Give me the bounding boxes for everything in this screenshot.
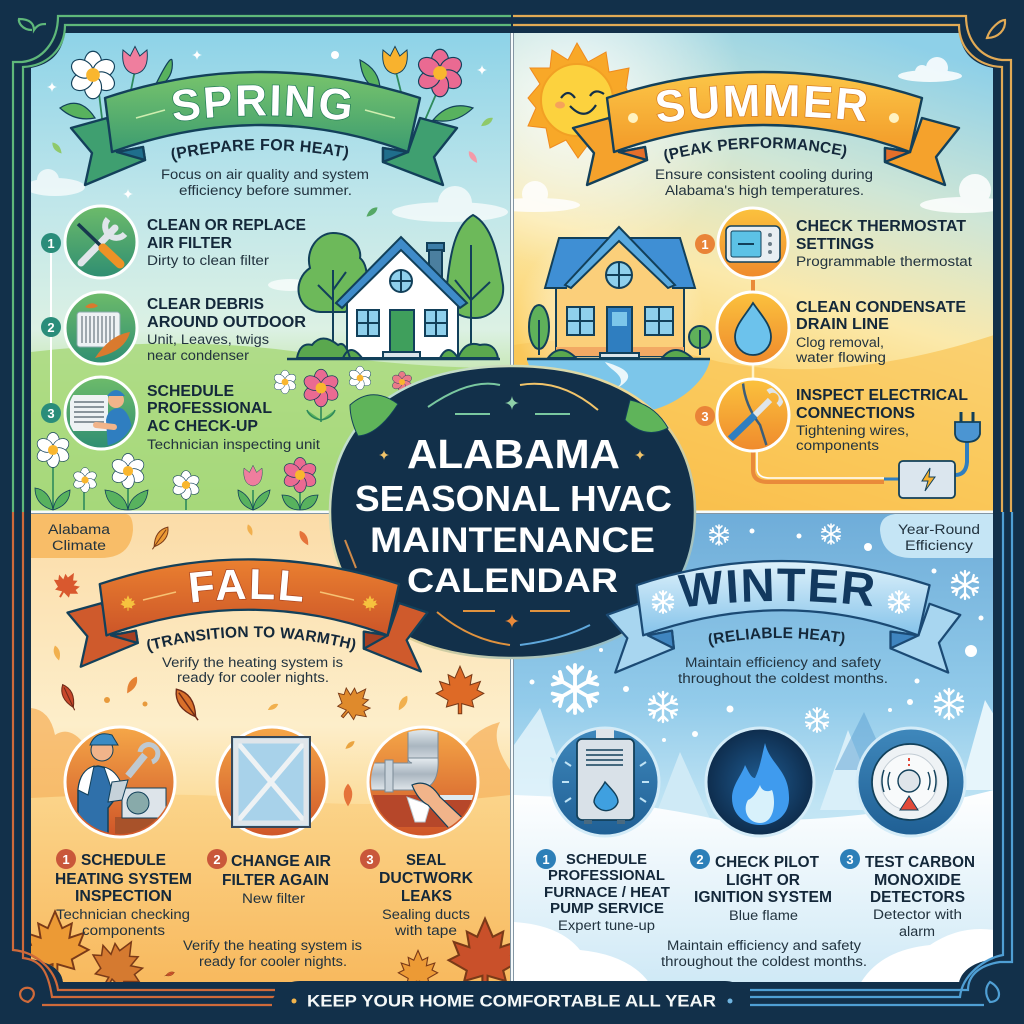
banner: winter bbox=[607, 561, 960, 673]
spring content bbox=[34, 46, 504, 511]
title text: CALENDAR bbox=[407, 562, 618, 600]
badge ornaments bbox=[345, 384, 598, 645]
step text: spring: AC CHECK-UP bbox=[147, 418, 258, 435]
icon: carbon monoxide detector bbox=[857, 728, 965, 836]
clouds: summer bbox=[490, 57, 1010, 213]
step text: fall: New filter bbox=[242, 891, 306, 906]
closing text: fall bbox=[183, 938, 362, 969]
banner: summer bbox=[573, 72, 959, 185]
step timeline: spring bbox=[41, 233, 61, 423]
sun glow bbox=[514, 33, 720, 251]
step text: spring: CLEAR DEBRIS bbox=[147, 296, 264, 313]
closing text: winter bbox=[661, 938, 867, 969]
icon: furnace bbox=[551, 728, 659, 836]
step text: spring: Dirty to clean filter bbox=[147, 253, 270, 268]
falling leaves bbox=[48, 524, 484, 809]
step text: summer: CONNECTIONS bbox=[796, 405, 915, 422]
step text: fall: DUCTWORK bbox=[379, 870, 474, 887]
step text: summer: components bbox=[796, 438, 879, 453]
house glow bbox=[522, 258, 696, 358]
pill: Alabama Climate: Alabama bbox=[48, 522, 111, 537]
intro text: spring bbox=[161, 167, 369, 198]
step text: winter: IGNITION SYSTEM bbox=[694, 889, 832, 906]
panel: fall bbox=[21, 514, 521, 1001]
summer content bbox=[527, 42, 981, 499]
step text: summer: SETTINGS bbox=[796, 236, 874, 253]
snowy trees bbox=[514, 700, 994, 830]
step text: summer: DRAIN LINE bbox=[796, 316, 889, 333]
pill: Year-Round Efficiency bbox=[880, 514, 993, 558]
step text: summer: Tightening wires, bbox=[796, 423, 909, 438]
meadow flowers bbox=[35, 366, 413, 510]
subheading: winter: (RELIABLE HEAT) bbox=[708, 627, 844, 648]
icon: wrench and wires bbox=[717, 379, 789, 451]
closing text: fall: Verify the heating system is bbox=[183, 938, 362, 953]
step text: winter: Expert tune-up bbox=[558, 918, 655, 933]
dunes: summer bbox=[514, 335, 994, 511]
step text: winter: FURNACE / HEAT bbox=[544, 885, 670, 901]
clouds: spring bbox=[25, 169, 508, 291]
step text: fall: 1 bbox=[62, 852, 70, 867]
step text: spring: CLEAN OR REPLACE bbox=[147, 217, 306, 234]
step text: fall: Technician checking bbox=[56, 907, 190, 922]
step text: spring: near condenser bbox=[147, 348, 250, 363]
intro text: winter: throughout the coldest months. bbox=[678, 671, 888, 686]
banner snowflakes bbox=[652, 591, 910, 613]
heading: summer: SUMMER bbox=[656, 84, 867, 122]
snow drifts bbox=[514, 922, 994, 984]
subheading: spring: (PREPARE FOR HEAT) bbox=[172, 139, 348, 163]
step text: spring: SCHEDULE bbox=[147, 383, 234, 400]
step text: winter: Blue flame bbox=[729, 908, 798, 923]
step text: summer: CLEAN CONDENSATE bbox=[796, 299, 966, 316]
step text: fall bbox=[55, 849, 474, 938]
intro text: spring: Focus on air quality and system bbox=[161, 167, 369, 182]
step text: winter: LIGHT OR bbox=[726, 872, 800, 889]
intro text: spring: efficiency before summer. bbox=[179, 183, 352, 198]
step text: winter: TEST CARBON bbox=[865, 854, 975, 871]
bottom banner bbox=[272, 981, 750, 1024]
hill: spring meadow bbox=[31, 344, 511, 511]
step text: winter: Detector with bbox=[873, 907, 962, 922]
step text: winter: 2 bbox=[696, 852, 704, 867]
icon: outdoor unit with leaves bbox=[65, 292, 137, 364]
intro text: winter bbox=[678, 655, 888, 686]
step text: summer: Clog removal, bbox=[796, 335, 884, 350]
step text: winter: SCHEDULE bbox=[566, 852, 647, 868]
intro text: fall bbox=[162, 655, 343, 685]
pill: Alabama Climate: Climate bbox=[52, 538, 106, 553]
title text: ALABAMA bbox=[407, 431, 620, 477]
connectors: summer bbox=[753, 280, 884, 482]
panel: summer bbox=[514, 33, 993, 510]
step text: fall: with tape bbox=[394, 923, 457, 938]
step text: spring: Technician inspecting unit bbox=[147, 437, 320, 452]
sparkles and petals: spring bbox=[47, 50, 487, 199]
step text: winter: CHECK PILOT bbox=[715, 854, 820, 871]
icon: wrench and screwdriver bbox=[65, 206, 137, 278]
intro text: fall: ready for cooler nights. bbox=[177, 670, 329, 685]
icon: smiling sun bbox=[528, 43, 632, 158]
icon: new air filter bbox=[217, 727, 327, 837]
banner text: KEEP YOUR HOME COMFORTABLE ALL YEAR bbox=[307, 992, 716, 1010]
step text: summer: INSPECT ELECTRICAL bbox=[796, 387, 968, 404]
step text: fall: INSPECTION bbox=[75, 888, 172, 905]
step text: winter bbox=[536, 849, 975, 939]
step text: fall: SCHEDULE bbox=[81, 852, 166, 869]
badges: summer bbox=[695, 234, 715, 426]
step text: winter: PUMP SERVICE bbox=[550, 901, 664, 917]
icon: sealing ductwork bbox=[368, 727, 480, 837]
step text: winter: 3 bbox=[846, 852, 854, 867]
step text: fall: components bbox=[82, 923, 165, 938]
pill: Year-Round Efficiency: Year-Round bbox=[898, 522, 980, 537]
step text: spring: Unit, Leaves, twigs bbox=[147, 332, 269, 347]
badges: summer: 3 bbox=[701, 409, 709, 424]
title text: MAINTENANCE bbox=[370, 521, 655, 560]
step timeline: spring: 2 bbox=[47, 320, 55, 335]
step text: fall: SEAL bbox=[406, 852, 446, 869]
house: summer bbox=[527, 227, 711, 412]
closing text: winter: throughout the coldest months. bbox=[661, 954, 867, 969]
step text: summer: Programmable thermostat bbox=[796, 254, 972, 269]
ground: fall bbox=[31, 794, 510, 984]
top flowers bbox=[60, 46, 473, 135]
banner ornaments: spring bbox=[136, 110, 395, 118]
step timeline: spring: 3 bbox=[47, 406, 55, 421]
orange trees silhouette bbox=[31, 708, 510, 800]
icon: thermostat bbox=[718, 208, 788, 278]
intro text: winter: Maintain efficiency and safety bbox=[685, 655, 881, 670]
step text: fall: FILTER AGAIN bbox=[222, 872, 329, 889]
center title badge bbox=[330, 366, 695, 658]
frame lines: gold top-right bbox=[513, 16, 1011, 512]
step text: summer: CHECK THERMOSTAT bbox=[796, 218, 967, 235]
title text: SEASONAL HVAC bbox=[355, 478, 672, 519]
title text bbox=[355, 431, 672, 600]
step text: fall: LEAKS bbox=[401, 888, 452, 905]
step text: winter: PROFESSIONAL bbox=[548, 868, 665, 884]
step text: fall: HEATING SYSTEM bbox=[55, 871, 192, 888]
intro text: fall: Verify the heating system is bbox=[162, 655, 343, 670]
intro text: summer bbox=[655, 167, 873, 198]
dots of snow bbox=[530, 528, 984, 742]
closing text: winter: Maintain efficiency and safety bbox=[667, 938, 861, 953]
badges: summer: 1 bbox=[701, 237, 709, 252]
icon: technician with outdoor unit bbox=[65, 727, 175, 838]
banner dots bbox=[292, 998, 732, 1004]
snow ground bbox=[514, 790, 994, 984]
step text: spring: AROUND OUTDOOR bbox=[147, 314, 306, 331]
badge leaves bbox=[350, 395, 668, 436]
step text: fall: CHANGE AIR bbox=[231, 853, 331, 870]
intro text: summer: Ensure consistent cooling during bbox=[655, 167, 873, 182]
petals: spring bbox=[50, 116, 494, 220]
step text: winter: DETECTORS bbox=[870, 889, 965, 906]
step text: fall: 3 bbox=[366, 852, 374, 867]
heading: fall: FALL bbox=[189, 568, 303, 603]
pill: Year-Round Efficiency: Efficiency bbox=[905, 538, 973, 553]
pill: Alabama Climate bbox=[31, 514, 133, 558]
icon: power box and plug bbox=[884, 412, 980, 498]
frame lines: green top-left bbox=[13, 16, 511, 512]
fall content bbox=[31, 514, 485, 969]
step text: summer bbox=[795, 218, 972, 453]
frame lines: blue bottom-right bbox=[750, 512, 1012, 1005]
frame lines: orange bottom-left bbox=[13, 512, 275, 1005]
closing text: fall: ready for cooler nights. bbox=[199, 954, 347, 969]
step text: fall: 2 bbox=[213, 852, 221, 867]
panel: winter bbox=[514, 514, 994, 984]
corner leaves bbox=[31, 909, 510, 982]
house: spring bbox=[287, 215, 503, 359]
heading: winter: WINTER bbox=[678, 568, 873, 607]
subheading: fall: (TRANSITION TO WARMTH) bbox=[147, 626, 356, 654]
banner ornaments: summer bbox=[628, 113, 899, 123]
step timeline: spring: 1 bbox=[47, 236, 55, 251]
banner ornaments: fall bbox=[120, 592, 378, 611]
step text: spring: AIR FILTER bbox=[147, 235, 232, 252]
winter content bbox=[536, 514, 993, 969]
step text: spring: PROFESSIONAL bbox=[147, 400, 272, 417]
step text: fall: Sealing ducts bbox=[382, 907, 470, 922]
step text: spring bbox=[147, 217, 320, 452]
banner: spring bbox=[71, 72, 457, 185]
step text: summer: water flowing bbox=[795, 350, 886, 365]
icon: water drop bbox=[717, 292, 789, 364]
heading: spring: SPRING bbox=[172, 84, 351, 122]
step text: winter: MONOXIDE bbox=[874, 872, 961, 889]
icon: technician inspecting AC bbox=[65, 377, 137, 450]
panel: spring bbox=[25, 33, 511, 511]
step text: winter: alarm bbox=[899, 924, 935, 939]
banner: fall bbox=[67, 559, 428, 672]
subheading: summer: (PEAK PERFORMANCE) bbox=[664, 137, 846, 164]
step text: winter: 1 bbox=[542, 852, 550, 867]
snowflakes bbox=[551, 524, 979, 732]
intro text: summer: Alabama's high temperatures. bbox=[665, 183, 864, 198]
icon: blue flame bbox=[706, 728, 814, 836]
